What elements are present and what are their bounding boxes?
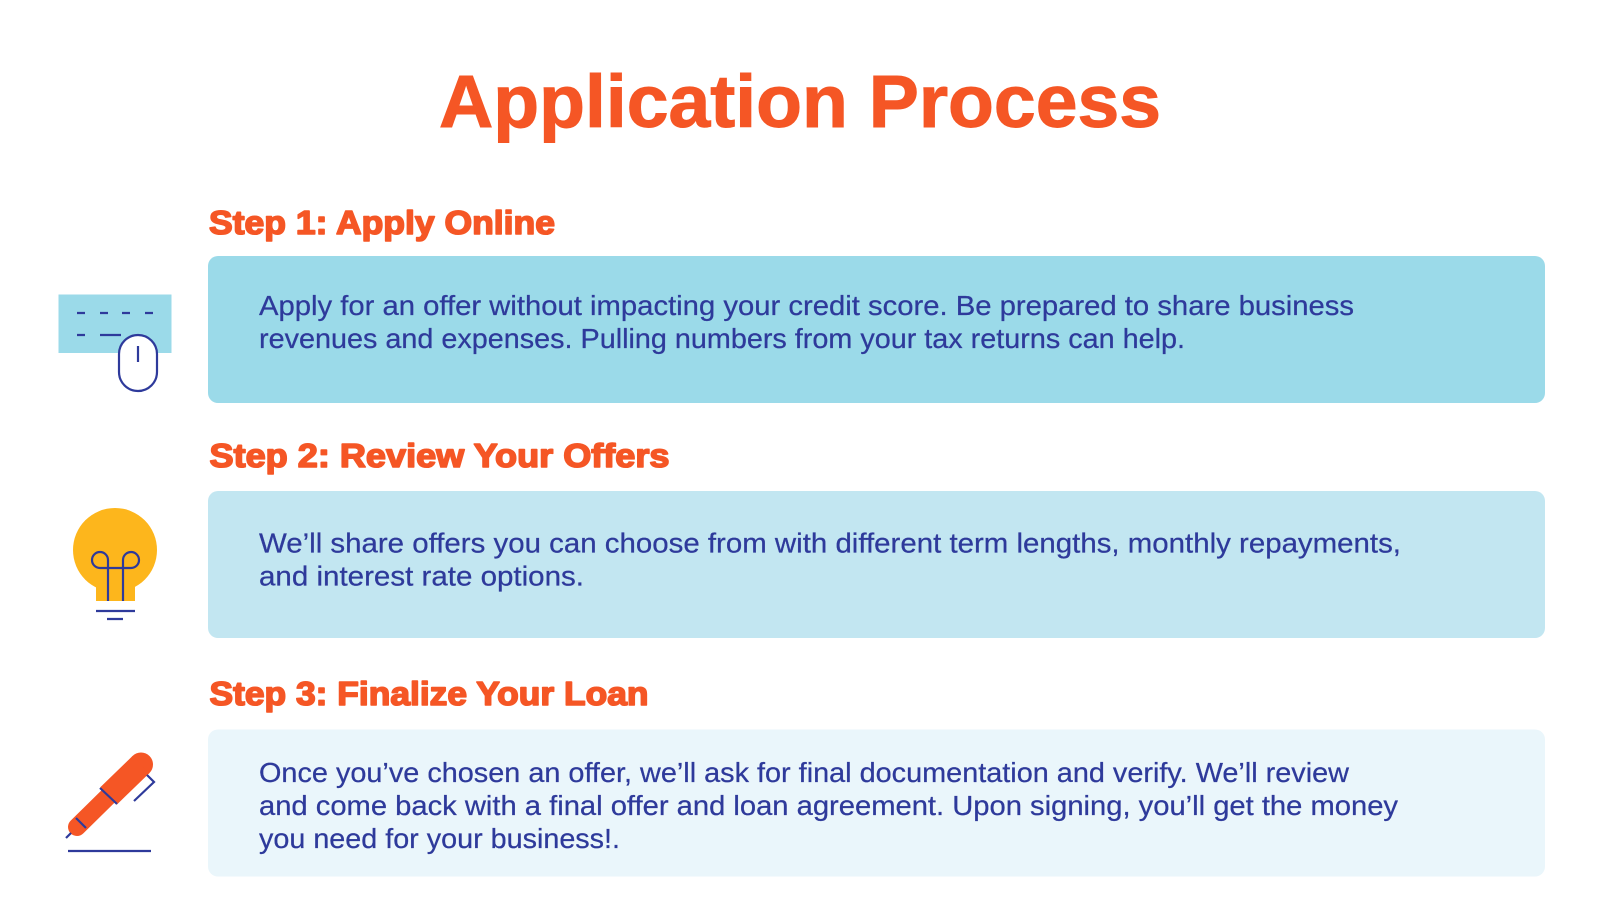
panel: step 3: Once you’ve chosen an offer, we’ll ask for final documentation and verify. We’ll review [259, 757, 1350, 788]
panel: step 2: We’ll share offers you can choose from with different term lengths, monthly repayments, [259, 528, 1401, 558]
step 1 heading: Step 1: Apply Online [209, 204, 555, 241]
panel: step 1: revenues and expenses. Pulling numbers from your tax returns can help. [259, 323, 1185, 354]
panel: step 3: and come back with a final offer and loan agreement. Upon signing, you’ll get the money [259, 790, 1398, 821]
panel: step 1: Apply for an offer without impacting your credit score. Be prepared to share business [259, 290, 1354, 321]
icon: light bulb [73, 508, 157, 619]
icon: pen [66, 752, 154, 851]
panel: step 2: and interest rate options. [259, 560, 584, 592]
title: Application Process [439, 60, 1161, 143]
step 2 heading: Step 2: Review Your Offers [210, 437, 670, 474]
panel: step 2 [208, 491, 1545, 638]
panel: step 1 [208, 256, 1545, 403]
icon: form with mouse [58, 294, 172, 391]
panel: step 3 [208, 730, 1545, 876]
panel: step 3: you need for your business!. [259, 823, 620, 854]
step 3 heading: Step 3: Finalize Your Loan [210, 675, 648, 712]
